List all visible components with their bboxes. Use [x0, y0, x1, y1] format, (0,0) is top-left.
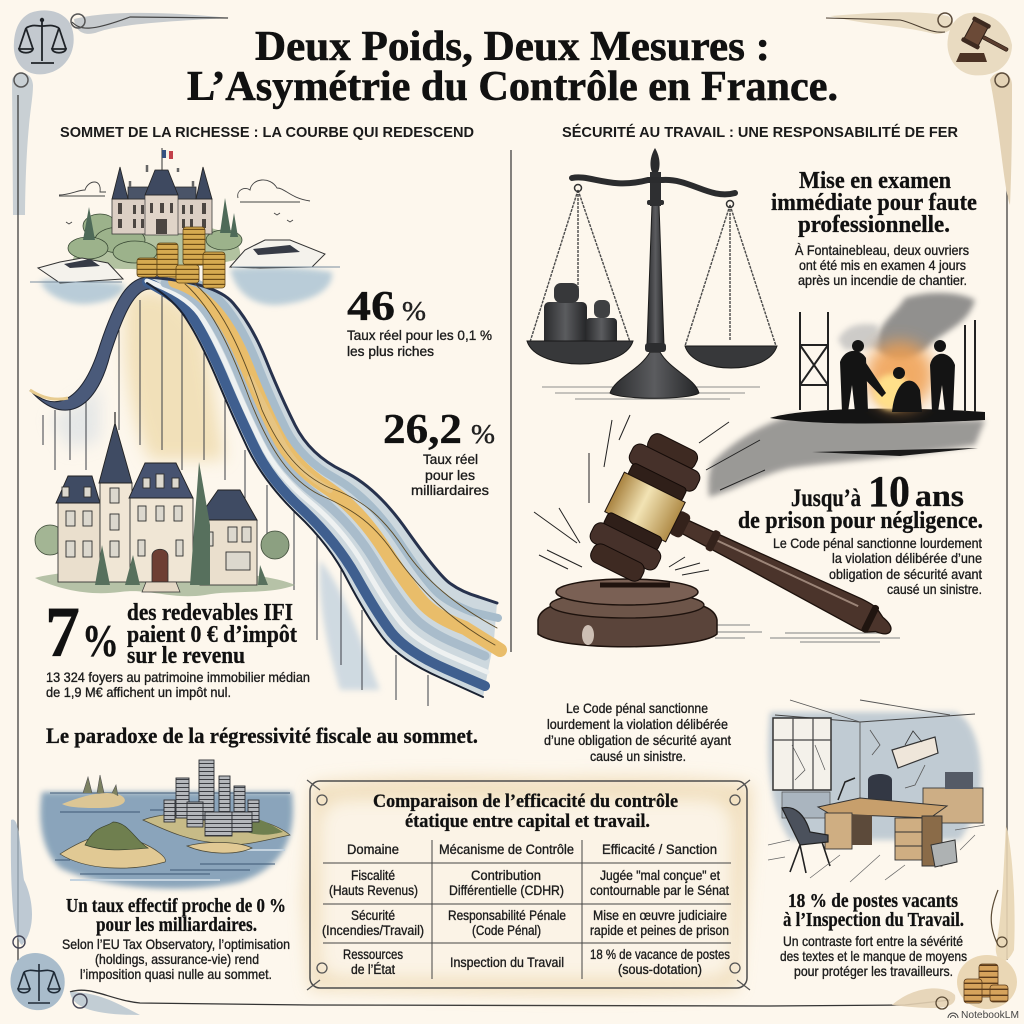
stat: 26,2 %: pour les — [425, 467, 475, 483]
heading: paradoxe: Le paradoxe de la régressivité fiscale au sommet. — [46, 723, 478, 748]
table text: Domaine — [347, 842, 399, 857]
table grid — [323, 840, 731, 979]
illustration: construction site fire — [699, 293, 985, 497]
text: jusqu'a 10 ans: causé un sinistre. — [887, 581, 982, 597]
stat: 26,2 %: Taux réel — [423, 451, 478, 467]
illustration: manor house — [35, 412, 295, 596]
chart: descending wealth curve — [30, 277, 500, 706]
text: jusqu'a 10 ans: ans — [915, 478, 964, 513]
stat: 7 % redevables IFI: % — [82, 616, 119, 666]
table text: (sous-dotation) — [618, 962, 702, 977]
text: code penal: Le Code pénal sanctionne — [566, 700, 708, 716]
corner icon: gavel top right — [947, 13, 1014, 75]
text: mise en examen: immédiate pour faute — [771, 190, 977, 216]
text: taux effectif: Selon l’EU Tax Observatory, l’optimisation — [62, 936, 290, 952]
stat: 7 % redevables IFI: des redevables IFI — [127, 600, 293, 626]
text: postes vacants: Un contraste fort entre la sévérité — [783, 933, 963, 949]
stat: 26,2 %: 26,2 — [383, 407, 462, 453]
text: mise en examen: après un incendie de chantier. — [798, 272, 967, 288]
title — [187, 24, 838, 110]
stat: 26,2 %: % — [471, 419, 495, 449]
table text: Mécanisme de Contrôle — [439, 842, 574, 857]
table title — [373, 791, 678, 832]
title: Deux Poids, Deux Mesures : — [255, 24, 770, 70]
table text: 18 % de vacance de postes — [590, 947, 730, 962]
heading: securite au travail: SÉCURITÉ AU TRAVAIL : UNE RESPONSABILITÉ DE FER — [562, 124, 958, 141]
stat: 7 % redevables IFI: 7 — [45, 592, 80, 672]
table title: Comparaison de l’efficacité du contrôle — [373, 791, 678, 812]
table text: Différentielle (CDHR) — [449, 883, 564, 898]
text: postes vacants: 18 % de postes vacants — [788, 890, 958, 912]
text: postes vacants: des textes et le manque de moyens — [780, 948, 967, 964]
ribbon body — [147, 277, 497, 697]
text: postes vacants: pour protéger les travailleurs. — [794, 963, 953, 979]
text: code penal: causé un sinistre. — [590, 748, 686, 764]
text: jusqu'a 10 ans: Le Code pénal sanctionne lourdement — [773, 535, 982, 551]
stat: 7 % redevables IFI: 13 324 foyers au patrimoine immobilier médian — [46, 669, 310, 685]
illustration: empty office — [768, 700, 985, 882]
text: mise en examen: Mise en examen — [799, 168, 951, 194]
table text: (Incendies/Travail) — [322, 923, 424, 938]
stat: 26,2 % — [383, 407, 495, 498]
text: taux effectif: (holdings, assurance-vie) rend — [95, 951, 259, 967]
heading: sommet de la richesse: SOMMET DE LA RICHESSE : LA COURBE QUI REDESCEND — [60, 124, 474, 141]
table text: Ressources — [343, 947, 403, 962]
stat: 7 % redevables IFI: sur le revenu — [127, 643, 245, 669]
illustration: gavel — [534, 415, 923, 694]
table text: Sécurité — [351, 908, 395, 923]
table title: étatique entre capital et travail. — [405, 811, 650, 832]
table text: Contribution — [471, 868, 541, 883]
stat: 26,2 %: milliardaires — [411, 482, 489, 498]
text: postes vacants — [780, 890, 967, 979]
table text — [322, 842, 730, 977]
text: postes vacants: à l’Inspection du Travail. — [783, 909, 964, 931]
text: code penal: d’une obligation de sécurité ayant — [544, 732, 731, 748]
text: jusqu'a 10 ans: 10 — [868, 467, 910, 516]
illustration: balance scale — [527, 148, 777, 399]
table text: Efficacité / Sanction — [602, 842, 717, 857]
stat: 7 % redevables IFI: de 1,9 M€ affichent un impôt nul. — [46, 684, 231, 700]
stat: 46 %: Taux réel pour les 0,1 % — [347, 327, 492, 343]
table text: Responsabilité Pénale — [448, 908, 566, 923]
text: jusqu'a 10 ans: la violation délibérée d’une — [832, 550, 982, 566]
stat: 7 % redevables IFI — [45, 592, 310, 700]
illustration: chateau with yachts on island — [30, 148, 340, 305]
text: taux effectif: pour les milliardaires. — [96, 914, 257, 936]
corner icon: coins bottom right — [964, 964, 1008, 1003]
text: code penal — [544, 700, 731, 764]
stat: 46 % — [347, 284, 492, 359]
stat: 7 % redevables IFI: paient 0 € d’impôt — [127, 622, 297, 648]
illustration: gold coin stacks — [137, 227, 225, 288]
stat: 46 %: 46 — [347, 284, 395, 330]
table text: Jugée "mal conçue" et — [600, 868, 720, 883]
text: jusqu'a 10 ans — [738, 467, 983, 597]
title: L’Asymétrie du Contrôle en France. — [187, 64, 838, 110]
text: mise en examen — [771, 168, 977, 288]
stat: 46 %: % — [402, 296, 426, 326]
gavel base — [538, 600, 717, 647]
text: jusqu'a 10 ans: obligation de sécurité avant — [829, 566, 982, 582]
text: code penal: lourdement la violation délibérée — [547, 716, 728, 732]
text: mise en examen: À Fontainebleau, deux ouvriers — [795, 242, 969, 258]
corner icon: scales top left — [14, 10, 74, 74]
table text: contournable par le Sénat — [590, 883, 729, 898]
brand: NotebookLM: NotebookLM — [961, 1009, 1019, 1021]
panel: comparison table — [303, 776, 752, 995]
table text: Fiscalité — [351, 868, 395, 883]
table text: de l’État — [351, 962, 395, 977]
text: jusqu'a 10 ans: Jusqu’à — [791, 485, 861, 512]
corner icon: scales bottom left — [10, 953, 65, 1010]
text: jusqu'a 10 ans: de prison pour négligence. — [738, 508, 983, 534]
text: taux effectif: Un taux effectif proche de 0 % — [66, 895, 286, 917]
text: taux effectif — [62, 895, 290, 982]
text: taux effectif: l’imposition quasi nulle au sommet. — [80, 966, 272, 982]
central divider — [510, 150, 512, 652]
stat: 46 %: les plus riches — [347, 343, 434, 359]
table text: Inspection du Travail — [450, 955, 564, 970]
table text: (Code Pénal) — [472, 923, 541, 938]
illustration: tax haven islands — [40, 760, 293, 889]
table text: (Hauts Revenus) — [329, 883, 418, 898]
table text: rapide et peines de prison — [590, 923, 729, 938]
text: mise en examen: ont été mis en examen 4 jours — [799, 257, 966, 273]
table text: Mise en œuvre judiciaire — [593, 908, 727, 923]
text: mise en examen: professionnelle. — [798, 212, 950, 238]
